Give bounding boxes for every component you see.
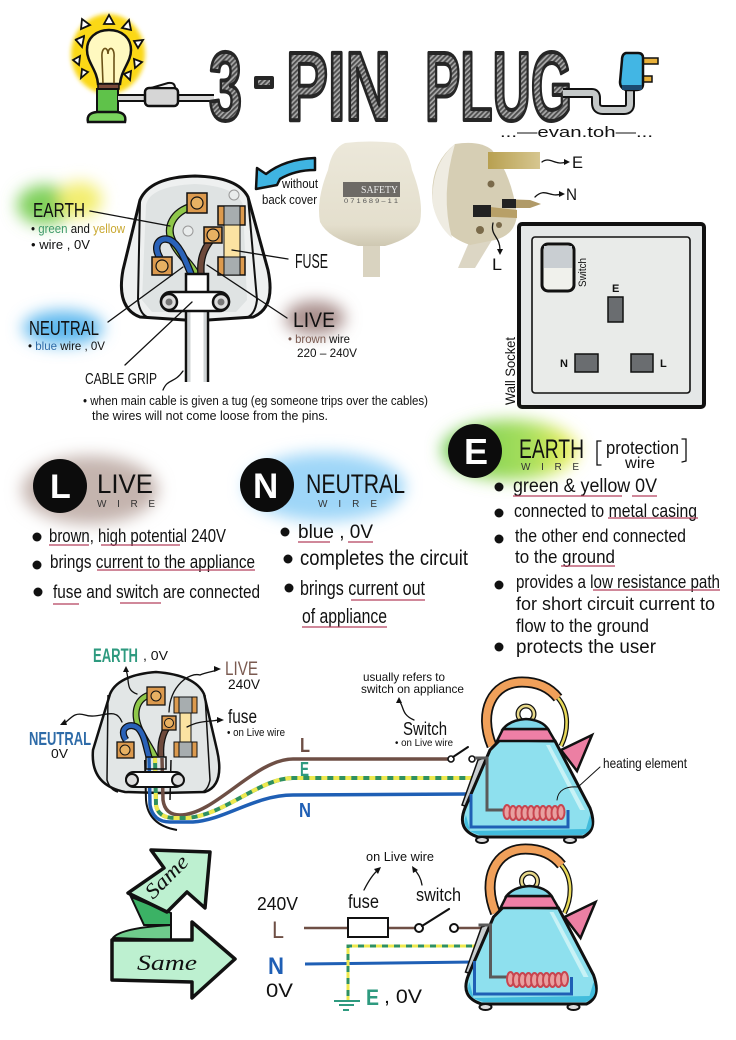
panel: plug wired to kettle [29,646,687,843]
panel: wall socket: E [612,283,619,295]
label: cable grip: the wires will not come loose from the pins. [92,408,328,423]
same labels: Same [140,850,193,904]
switch [361,670,475,762]
bullets: fuse and switch are connected [53,582,260,602]
terminals and wires [152,193,222,275]
bullets: green & yellow 0V [513,476,657,497]
heading: protection [606,438,679,458]
circuit labels: fuse [348,892,379,913]
bullets [494,476,720,658]
label: cable grip [83,371,428,423]
callout labels: NEUTRAL [29,729,91,749]
bullets [32,526,260,604]
label: cable grip: CABLE GRIP [85,371,157,388]
heading [442,420,686,480]
wires [304,928,490,1000]
heading: WIRE [318,499,380,510]
fuse [218,206,245,275]
label: live: • brown wire [288,332,350,346]
kettle with heating element: heating element [603,755,687,771]
bullets: protects the user [516,637,657,658]
icon: blue arrow without back cover: back cover [262,192,318,207]
circuit labels: N [268,953,284,980]
heading: EARTH [519,434,584,464]
callout labels: EARTH [93,646,138,667]
heading: WIRE [97,499,158,510]
heading: L [50,468,71,506]
label: live: 220 – 240V [297,346,357,360]
panel: wall socket: L [660,358,667,370]
callout labels: • on Live wire [227,727,285,739]
bullets: brown, high potential 240V [49,526,226,546]
circuit labels [257,849,461,1010]
switch: Switch [403,719,447,739]
wire letters: E [300,759,309,781]
switch: usually refers to [363,670,445,684]
bullets: to the ground [515,547,615,567]
panel: wall socket: N [560,358,568,370]
heading: N [253,467,278,506]
label: fuse: FUSE [295,251,328,273]
label: earth: • green and yellow [31,221,126,236]
bullets: of appliance [302,606,387,628]
leader lines [90,211,288,390]
label: live: LIVE [293,309,335,332]
author credit: ...—evan.toh—... [500,124,653,141]
callout labels [29,646,285,761]
title text [209,32,572,141]
photo: plug side with pins [432,143,583,274]
panel: circuit diagram [257,849,596,1010]
pin labels [492,153,583,274]
callout labels: 0V [51,746,68,761]
heading [240,453,405,521]
callout labels: LIVE [225,659,258,680]
icon: blue arrow without back cover [256,158,318,207]
plug body [93,672,219,793]
label: neutral: • blue wire , 0V [28,339,105,353]
output wires [145,757,475,830]
label: live [288,309,357,360]
switch symbol [415,909,458,932]
label: cable grip: • when main cable is given a tug (eg someone trips over the cables) [83,393,428,408]
icon: blue plug with cable [563,53,658,110]
heading: WIRE [521,462,582,473]
bullets: connected to metal casing [514,501,697,521]
fuse symbol [348,918,388,937]
title text: PLUG [425,32,572,141]
title banner [71,14,658,141]
circuit labels: L [272,917,284,944]
icon: light bulb [71,14,145,122]
title text: PIN [286,32,391,141]
cable and grip [161,274,229,382]
bullets [280,522,468,628]
label: earth: • wire , 0V [31,237,90,252]
socket slots [575,297,653,372]
panel: wall socket [502,224,704,407]
colour glows [17,182,345,345]
kettle with heating element [462,682,687,843]
wire letters [299,735,311,822]
icon: blue arrow without back cover: without [281,176,318,191]
switch: Switch [577,258,589,287]
photo: plug front [319,142,421,277]
circuit labels: on Live wire [366,849,434,864]
icon: cable with switch [118,83,214,106]
circuit labels: , 0V [384,987,422,1008]
bullets: brings current to the appliance [50,552,255,572]
label: earth [31,200,126,252]
bullets: completes the circuit [300,547,468,570]
ground symbol [334,1001,360,1010]
same arrows ribbon: Same [137,950,197,975]
heading: NEUTRAL [306,469,405,499]
callout labels: fuse [228,707,257,728]
switch: switch on appliance [361,682,464,696]
same arrows ribbon [112,850,235,998]
panel: neutral wire [240,453,468,628]
switch: • on Live wire [395,738,453,749]
bullets: brings current out [300,578,425,600]
heading [22,456,158,524]
bullets: the other end connected [515,526,686,546]
heading: LIVE [97,469,153,499]
label: neutral [28,318,105,353]
wire letters: N [299,800,311,822]
callout labels: 240V [228,676,261,692]
label: neutral: NEUTRAL [29,318,99,340]
circuit labels: E [366,985,379,1010]
pin labels: N [566,185,577,204]
circuit labels: 0V [266,981,293,1002]
bullets: blue , 0V [298,522,373,543]
switch [542,244,589,291]
panel: earth wire [442,420,720,658]
pin labels: E [572,153,583,172]
pin labels: L [492,255,502,274]
plug body [121,176,270,320]
terminals and inner wires [117,687,197,787]
bullets: flow to the ground [516,616,649,636]
photo: plug front: 0 7 1 6 8 9 – 1 1 [344,199,399,205]
wire letters: L [300,735,310,757]
circuit labels: switch [416,885,461,905]
wall socket label: Wall Socket [502,337,518,405]
bullets: for short circuit current to [516,594,715,614]
photo: plug front: SAFETY [361,185,398,196]
panel: live wire [22,456,260,604]
kettle [466,849,596,1010]
title text: 3 [209,32,242,141]
callout labels: , 0V [143,648,168,663]
label: earth: EARTH [33,200,85,222]
heading: wire [624,455,655,472]
panel: labelled plug diagram [17,176,428,423]
heading: E [464,431,488,472]
circuit labels: 240V [257,894,298,914]
